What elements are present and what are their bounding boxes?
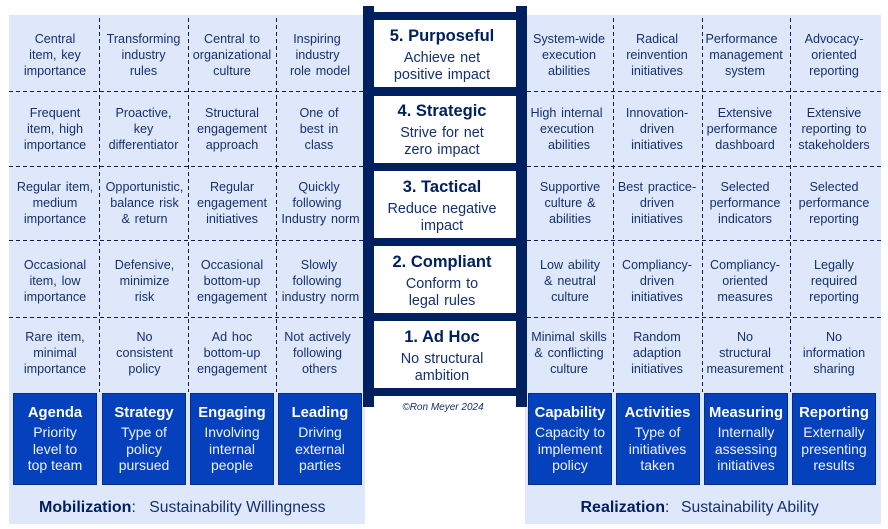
column: measuring levels: indicators [718, 212, 772, 226]
column: capability levels: High internal [530, 106, 603, 120]
column: engaging levels: Regular [210, 180, 254, 194]
column: agenda levels: importance [24, 138, 86, 152]
column: strategy levels: minimize [120, 274, 169, 288]
column: capability levels: Minimal skills [531, 330, 607, 344]
column: capability levels: Supportive [540, 180, 600, 194]
center backdrop [365, 396, 525, 529]
column: reporting levels: reporting [809, 290, 859, 304]
heading: realization: Sustainability Ability [681, 499, 819, 516]
box: measuring: Measuring [709, 405, 783, 421]
column: leading levels: Not actively [284, 330, 351, 344]
box: reporting: Reporting [799, 405, 869, 421]
ladder rung 1: ad hoc: 1. Ad Hoc [404, 328, 480, 346]
column: engaging levels: Central to [204, 32, 260, 46]
box: strategy [102, 394, 186, 484]
column: strategy levels: industry [121, 48, 166, 62]
box: leading: Leading [292, 405, 348, 421]
column: activities levels: initiatives [631, 64, 683, 78]
column: capability levels: abilities [548, 64, 590, 78]
column: reporting levels: reporting [809, 64, 859, 78]
ladder rung 5: purposeful [374, 20, 516, 87]
column: reporting levels: No [826, 330, 842, 344]
column: leading levels: Slowly [301, 258, 338, 272]
column: reporting levels: Selected [809, 180, 859, 194]
box: agenda: Agenda [28, 405, 83, 421]
column: activities levels: Innovation- [626, 106, 688, 120]
ladder rung 5: purposeful: 5. Purposeful [390, 27, 494, 45]
column: activities levels: reinvention [626, 48, 688, 62]
column: capability levels: culture & [544, 196, 596, 210]
column: capability levels: culture [550, 362, 588, 376]
column: engaging levels: engagement [197, 362, 268, 376]
column: capability levels: & conflicting [534, 346, 604, 360]
column: leading levels: class [305, 138, 333, 152]
box: agenda: top team [28, 457, 82, 473]
column: activities levels: initiatives [631, 362, 683, 376]
box: agenda: level to [33, 441, 77, 457]
column: capability levels: abilities [549, 212, 591, 226]
column: measuring levels [705, 32, 784, 376]
column: capability levels: culture [551, 290, 589, 304]
column: agenda levels: Central [35, 32, 75, 46]
column: agenda levels: item, key [29, 48, 82, 62]
column: strategy levels: No [136, 330, 153, 344]
column: strategy levels: risk [135, 290, 155, 304]
column: measuring levels: measures [717, 290, 773, 304]
box: strategy: Strategy [114, 405, 174, 421]
box: capability: implement [538, 441, 602, 457]
column: activities levels: initiatives [631, 138, 683, 152]
copyright: ©Ron Meyer 2024 [402, 402, 484, 413]
ladder rung 1: ad hoc [374, 321, 516, 388]
column: engaging levels: engagement [197, 122, 268, 136]
column: activities levels [618, 32, 696, 376]
box: leading: external [295, 441, 345, 457]
column: activities levels: driven [640, 122, 674, 136]
ladder rung 2: compliant: legal rules [409, 293, 475, 309]
column: leading levels: following [292, 196, 342, 210]
column: engaging levels: bottom-up [204, 274, 260, 288]
column: activities levels: driven [640, 274, 674, 288]
box: activities: Type of [635, 424, 681, 440]
column: measuring levels: performance [710, 196, 780, 210]
box: engaging: people [211, 457, 253, 473]
column: measuring levels: performance [707, 122, 777, 136]
column: strategy levels: rules [130, 64, 157, 78]
ladder rung 2: compliant [374, 246, 516, 313]
column: activities levels: Best practice- [618, 180, 696, 194]
column: measuring levels: Selected [720, 180, 770, 194]
column: measuring levels: management [709, 48, 783, 62]
column: leading levels: One of [299, 106, 339, 120]
heading: realization: Realization: [580, 499, 669, 516]
column: leading levels: industry norm [282, 290, 359, 304]
column: strategy levels: & return [121, 212, 168, 226]
box: activities: taken [640, 457, 675, 473]
box: activities [616, 394, 700, 484]
box: measuring [704, 394, 788, 484]
column: leading levels: others [302, 362, 337, 376]
ladder rung 2: compliant: 2. Compliant [392, 253, 492, 271]
column: measuring levels: measurement [706, 362, 784, 376]
column: leading levels [281, 32, 360, 376]
column: measuring levels: Compliancy- [710, 258, 780, 272]
column: engaging levels [193, 32, 271, 376]
column: reporting levels: information [803, 346, 865, 360]
box: agenda [14, 394, 96, 484]
column: engaging levels: bottom-up [204, 346, 260, 360]
column: leading levels: Inspiring [293, 32, 341, 46]
box: capability: Capacity to [535, 424, 605, 440]
box: activities: initiatives [629, 441, 686, 457]
column: agenda levels: item, low [30, 274, 81, 288]
column: engaging levels: Occasional [201, 258, 263, 272]
column: activities levels: initiatives [631, 212, 683, 226]
box: measuring: Internally [718, 424, 774, 440]
ladder rung 1: ad hoc: No structural [401, 351, 483, 367]
column: capability levels: & neutral [544, 274, 596, 288]
column: reporting levels: reporting to [801, 122, 867, 136]
box: capability: Capability [535, 405, 606, 421]
column: capability levels: abilities [548, 138, 590, 152]
column: capability levels: execution [540, 122, 594, 136]
column: leading levels: following [292, 274, 342, 288]
column: engaging levels: approach [206, 138, 258, 152]
box: measuring: initiatives [717, 457, 775, 473]
column: strategy levels: Proactive, [116, 106, 172, 120]
column: leading levels: industry [295, 48, 340, 62]
column: agenda levels: Occasional [24, 258, 86, 272]
column: engaging levels: engagement [197, 290, 268, 304]
column: strategy levels: Opportunistic, [106, 180, 183, 194]
box: leading: parties [299, 457, 341, 473]
column: capability levels: Low ability [540, 258, 601, 272]
box: leading: Driving [298, 424, 342, 440]
box: strategy: policy [126, 441, 162, 457]
box: agenda: Priority [33, 424, 77, 440]
column: activities levels: Random [633, 330, 681, 344]
column: reporting levels: Extensive [807, 106, 861, 120]
column: measuring levels: No [737, 330, 753, 344]
column: agenda levels: Regular item, [17, 180, 93, 194]
column: strategy levels: policy [128, 362, 161, 376]
column: agenda levels: Rare item, [25, 330, 85, 344]
column: engaging levels: Ad hoc [212, 330, 252, 344]
column: reporting levels: sharing [813, 362, 855, 376]
column: agenda levels: importance [24, 290, 86, 304]
column: leading levels: role model [290, 64, 350, 78]
ladder rung 5: purposeful: Achieve net [404, 50, 480, 66]
heading: mobilization: Sustainability Willingness [149, 499, 326, 516]
box: reporting: presenting [801, 441, 867, 457]
ladder rung 4: strategic [374, 96, 516, 163]
column: engaging levels: culture [213, 64, 251, 78]
box: engaging [190, 394, 274, 484]
box: engaging: internal [209, 441, 255, 457]
column: activities levels: driven [640, 196, 674, 210]
column: leading levels: Quickly [298, 180, 340, 194]
column: measuring levels: system [725, 64, 765, 78]
box: reporting [792, 394, 876, 484]
column: reporting levels: required [811, 274, 857, 288]
ladder rung 2: compliant: Conform to [406, 276, 478, 292]
ladder rung 1: ad hoc: ambition [415, 368, 469, 384]
column: strategy levels: balance risk [110, 196, 179, 210]
box: capability [528, 394, 612, 484]
column: strategy levels [106, 32, 183, 376]
column: strategy levels: key [134, 122, 154, 136]
column: engaging levels: engagement [197, 196, 268, 210]
column: agenda levels: importance [24, 64, 86, 78]
ladder rung 3: tactical: 3. Tactical [403, 178, 481, 196]
ladder rung 4: strategic: 4. Strategic [398, 102, 486, 120]
column: agenda levels: medium [33, 196, 77, 210]
box: strategy: pursued [119, 457, 169, 473]
box: measuring: assessing [715, 441, 777, 457]
column: strategy levels: Transforming [107, 32, 180, 46]
ladder rung 3: tactical [374, 171, 516, 238]
box: reporting: results [813, 457, 855, 473]
panel: realization [525, 15, 881, 524]
column: activities levels: initiatives [631, 290, 683, 304]
column: agenda levels: item, high [27, 122, 83, 136]
column: strategy levels: differentiator [109, 138, 178, 152]
column: activities levels: adaption [633, 346, 681, 360]
column: leading levels: Industry norm [281, 212, 360, 226]
column: reporting levels: Legally [814, 258, 855, 272]
column: strategy levels: Defensive, [115, 258, 174, 272]
column: measuring levels: structural [719, 346, 771, 360]
box: reporting: Externally [803, 424, 865, 440]
column: engaging levels: organizational [193, 48, 271, 62]
ladder frame [363, 6, 527, 407]
column: reporting levels: reporting [809, 212, 859, 226]
ladder rung 5: purposeful: positive impact [394, 67, 490, 83]
column: engaging levels: initiatives [206, 212, 258, 226]
column: measuring levels: oriented [722, 274, 768, 288]
column: agenda levels: importance [24, 212, 86, 226]
column: agenda levels: Frequent [30, 106, 81, 120]
ladder rung 4: strategic: Strive for net [400, 125, 484, 141]
heading: mobilization: Mobilization: [39, 499, 136, 516]
column: reporting levels: performance [799, 196, 869, 210]
box: leading [278, 394, 362, 484]
column: agenda levels: minimal [33, 346, 77, 360]
column: measuring levels: Extensive [718, 106, 772, 120]
column: capability levels [530, 32, 607, 376]
column: agenda levels: importance [24, 362, 86, 376]
box: engaging: Engaging [198, 405, 266, 421]
column: reporting levels [798, 32, 870, 376]
column: reporting levels: stakeholders [798, 138, 870, 152]
ladder rung 3: tactical: impact [421, 218, 463, 234]
column: reporting levels: oriented [811, 48, 857, 62]
panel: mobilization [9, 15, 365, 524]
column: leading levels: following [293, 346, 342, 360]
column: strategy levels: consistent [116, 346, 173, 360]
column: measuring levels: dashboard [715, 138, 775, 152]
column: activities levels: Radical [636, 32, 678, 46]
column: leading levels: best in [300, 122, 338, 136]
column: agenda levels [17, 32, 93, 376]
column: reporting levels: Advocacy- [805, 32, 863, 46]
column: measuring levels: Performance [705, 32, 778, 46]
box: capability: policy [552, 457, 588, 473]
column: capability levels: execution [542, 48, 596, 62]
ladder rung 3: tactical: Reduce negative [387, 201, 497, 217]
ladder rung 4: strategic: zero impact [404, 142, 480, 158]
column: capability levels: System-wide [533, 32, 605, 46]
column: engaging levels: Structural [205, 106, 259, 120]
column: activities levels: Compliancy- [622, 258, 692, 272]
box: activities: Activities [625, 405, 690, 421]
box: engaging: Involving [204, 424, 260, 440]
box: strategy: Type of [121, 424, 167, 440]
